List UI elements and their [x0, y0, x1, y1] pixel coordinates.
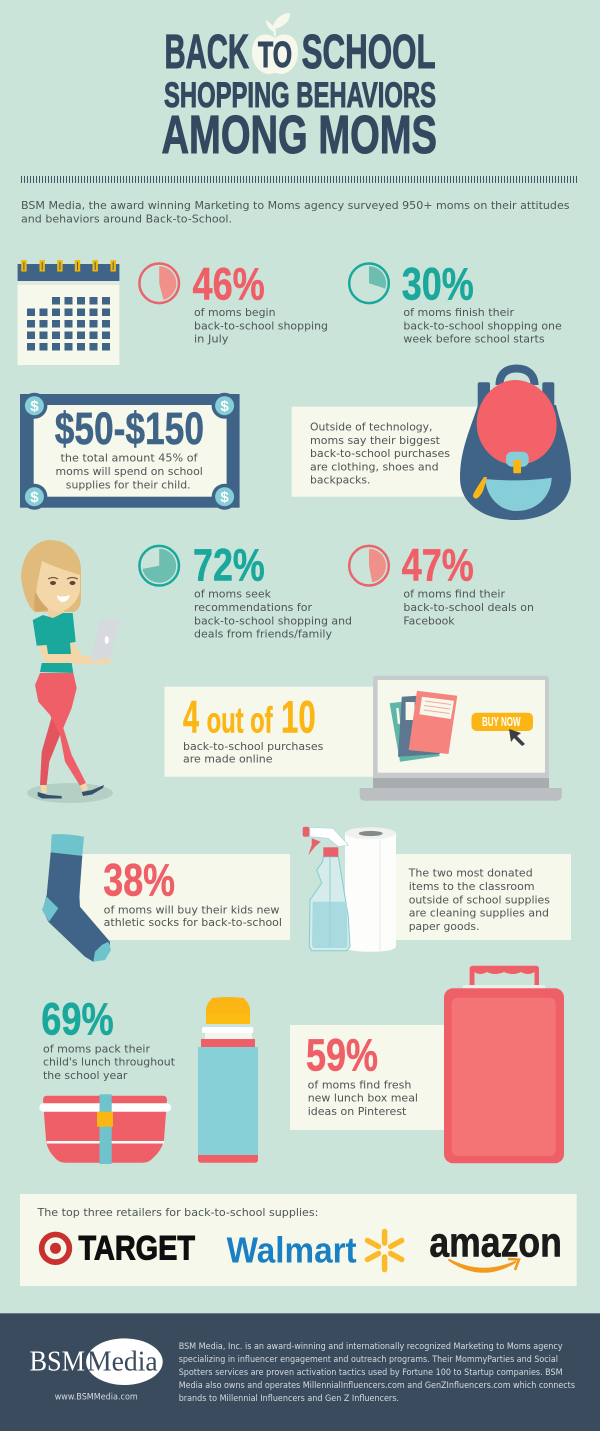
panel: pinterest text: of moms find fresh	[308, 1078, 411, 1091]
panel: backpack text: are clothing, shoes and	[310, 460, 439, 473]
panel: money banknote: the total amount 45% of	[60, 452, 199, 465]
stat: 47%	[349, 540, 534, 627]
stat: 30%: 30%	[402, 258, 474, 309]
pie chart: 46%	[139, 264, 179, 303]
footer	[0, 1313, 600, 1431]
icon: dollar coins: $	[220, 398, 229, 415]
panel: 4 out of 10	[164, 687, 374, 777]
panel: socks text: of moms will buy their kids new	[104, 903, 279, 916]
panel: 4 out of 10: 4	[183, 692, 199, 743]
panel: 4 out of 10: 10	[281, 692, 316, 743]
panel: backpack text: backpacks.	[310, 473, 370, 486]
intro text: BSM Media, the award winning Marketing to Moms agency surveyed 950+ moms on their attitudes	[21, 199, 570, 212]
panel: 4 out of 10: back-to-school purchases	[183, 740, 324, 753]
website: www.BSMMedia.com	[55, 1392, 138, 1402]
title line 3: AMONG MOMS	[162, 105, 437, 165]
panel: backpack text	[292, 407, 482, 497]
panel: retailers	[20, 1194, 577, 1286]
panel: money banknote: $50-$150	[55, 403, 204, 454]
logo: BSM Media: BSM	[30, 1346, 85, 1378]
title word: SCHOOL: SCHOOL	[302, 26, 436, 79]
stat: 72%: recommendations for	[194, 601, 312, 614]
panel: cleaning supplies text: items to the classroom	[409, 880, 535, 893]
retailers heading: The top three retailers for back-to-school supplies:	[36, 1206, 318, 1219]
stat: 30%	[349, 258, 562, 346]
panel: pinterest text: ideas on Pinterest	[308, 1105, 407, 1118]
stat: 30%: back-to-school shopping one	[403, 319, 562, 332]
stat: 47%: of moms find their	[403, 588, 505, 601]
icon: paper towel roll	[345, 827, 396, 952]
stat: 46%: back-to-school shopping	[194, 319, 328, 332]
panel: pinterest text: 59%	[306, 1030, 378, 1081]
intro text	[21, 199, 570, 226]
about text: brands to Millennial Influencers and Gen Z Influencers.	[179, 1394, 399, 1404]
illustration: woman with laptop	[21, 540, 120, 803]
icon: notebooks	[390, 691, 457, 762]
about text	[179, 1342, 575, 1404]
stat: 72%: back-to-school shopping and	[194, 614, 352, 627]
about text: BSM Media, Inc. is an award-winning and internationally recognized Marketing to Moms agency	[179, 1342, 563, 1352]
panel: 4 out of 10: out of	[207, 700, 273, 741]
panel: backpack text: back-to-school purchases	[310, 447, 450, 460]
about text: Spotters services are proven activation tactics used by Fortune 100 to Startup companies. BSM	[179, 1368, 563, 1378]
stat: 69%: the school year	[43, 1069, 128, 1082]
stat: 30%: of moms finish their	[403, 306, 514, 319]
stat: 46%: of moms begin	[194, 306, 276, 319]
pie chart: 30%	[349, 264, 389, 303]
illustration: laptop with notebooks	[360, 676, 562, 801]
logo: Target: TARGET	[78, 1229, 195, 1267]
logo: Target	[39, 1229, 195, 1267]
panel: money banknote: supplies for their child.	[66, 478, 191, 491]
about text: specializing in influencer engagement and outreach programs. Their MommyParties and Social	[179, 1355, 558, 1365]
stat: 69%: of moms pack their	[43, 1042, 150, 1055]
panel: money banknote: moms will spend on school	[56, 465, 203, 478]
icon: calendar	[18, 260, 119, 365]
icon: cursor	[509, 729, 525, 746]
panel: pinterest text: new lunch box meal	[308, 1092, 418, 1105]
stat: 46%	[139, 258, 328, 346]
icon: lunch container	[39, 1094, 171, 1164]
panel: socks text: athletic socks for back-to-school	[104, 916, 282, 929]
button: buy now: BUY NOW	[482, 714, 521, 729]
panel: pinterest text	[290, 1025, 445, 1130]
logo: BSM Media: Media	[87, 1346, 158, 1378]
logo: BSM Media	[30, 1338, 163, 1385]
stat: 69%: child's lunch throughout	[43, 1056, 176, 1069]
stat: 47%: back-to-school deals on	[403, 601, 534, 614]
icon: lunch box	[444, 966, 564, 1163]
panel: 4 out of 10: are made online	[183, 753, 273, 766]
stat: 46%: in July	[194, 333, 229, 346]
panel: cleaning supplies text: outside of school supplies	[409, 893, 550, 906]
icon: dollar coins	[21, 393, 238, 510]
stat: 69%: 69%	[41, 994, 114, 1045]
icon: apple	[252, 14, 298, 74]
pie chart: 47%	[349, 546, 389, 586]
intro text: and behaviors around Back-to-School.	[21, 212, 232, 226]
panel: money banknote	[20, 393, 240, 510]
panel: socks text: 38%	[103, 855, 175, 906]
panel: backpack text: moms say their biggest	[310, 434, 441, 447]
stat: 72%: 72%	[193, 540, 265, 591]
stat: 72%: deals from friends/family	[194, 627, 332, 640]
stat: 46%: 46%	[192, 258, 265, 309]
panel: backpack text: Outside of technology,	[310, 421, 432, 434]
icon: spray bottle	[303, 827, 350, 951]
about text: Media also owns and operates MillennialInfluencers.com and GenZInfluencers.com which connects	[179, 1381, 575, 1391]
icon: dollar coins: $	[30, 489, 39, 506]
logo: Amazon: amazon	[429, 1219, 562, 1266]
stat: 72%: of moms seek	[194, 588, 272, 601]
panel: cleaning supplies text: paper goods.	[409, 920, 480, 933]
icon: dollar coins: $	[30, 398, 39, 415]
panel: cleaning supplies text	[396, 854, 571, 940]
icon: backpack	[460, 368, 571, 520]
stat: 47%: 47%	[402, 540, 474, 591]
title word: BACK: BACK	[164, 26, 249, 79]
icon: thermos	[198, 997, 258, 1163]
logo: Walmart: Walmart	[227, 1229, 357, 1270]
button: buy now	[472, 713, 533, 731]
title line 2: SHOPPING BEHAVIORS	[164, 76, 436, 115]
title word: TO: TO	[258, 34, 292, 75]
stat: 47%: Facebook	[403, 614, 455, 627]
pie chart: 72%	[139, 546, 179, 586]
panel: cleaning supplies text: The two most donated	[408, 867, 533, 880]
panel: socks text	[80, 854, 290, 940]
stat: 72%	[139, 540, 352, 640]
icon: sock	[42, 834, 111, 962]
stat: 30%: week before school starts	[403, 333, 545, 346]
panel: cleaning supplies text: are cleaning supplies and	[409, 907, 549, 920]
title block	[162, 14, 437, 165]
icon: dollar coins: $	[220, 489, 229, 506]
stat: 69%	[41, 994, 176, 1082]
